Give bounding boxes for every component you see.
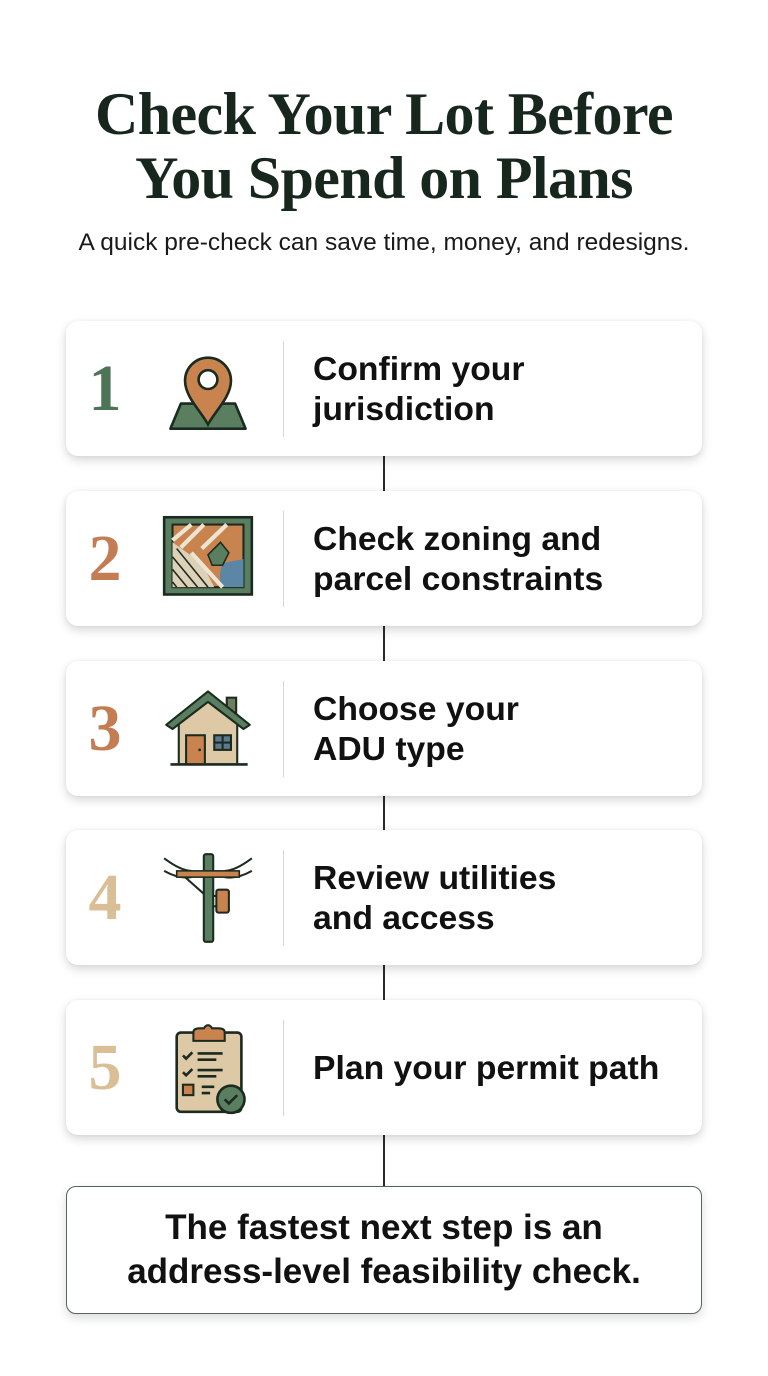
icon: utility pole <box>164 853 252 943</box>
card 3: ADU type <box>66 661 702 796</box>
step text: ADU type <box>313 730 465 768</box>
icon: map pin <box>169 356 247 430</box>
connector line <box>383 456 385 1186</box>
step text: Review utilities <box>313 858 556 896</box>
card 5: permit path <box>66 1000 702 1135</box>
number 2: 2 <box>88 522 122 595</box>
step text <box>313 520 603 598</box>
step text: jurisdiction <box>313 390 495 428</box>
icon: zoning map <box>162 516 254 596</box>
card 4: utilities <box>66 830 702 965</box>
number 4: 4 <box>88 861 122 934</box>
number 1: 1 <box>88 352 122 425</box>
icon: house <box>165 690 251 766</box>
callout: next step <box>66 1186 702 1314</box>
number 3: 3 <box>88 692 122 765</box>
number 5: 5 <box>88 1031 122 1104</box>
step text: and access <box>313 898 495 936</box>
callout: next step: The fastest next step is an <box>165 1208 603 1247</box>
step text <box>313 690 519 768</box>
subtitle: A quick pre-check can save time, money, and redesigns. <box>78 229 690 256</box>
step text <box>313 858 556 936</box>
title <box>95 81 673 211</box>
icon: clipboard <box>175 1024 246 1114</box>
step text: Choose your <box>313 690 519 728</box>
title: Check Your Lot Before <box>95 81 673 147</box>
card 2: zoning <box>66 491 702 626</box>
step text: Check zoning and <box>313 520 601 558</box>
card 1: confirm jurisdiction <box>66 321 702 456</box>
step text: Plan your permit path <box>313 1048 659 1086</box>
step text: Confirm your <box>313 350 524 388</box>
title: You Spend on Plans <box>135 145 633 211</box>
step text <box>312 350 524 428</box>
callout: next step: address-level feasibility check. <box>127 1252 641 1291</box>
step text: parcel constraints <box>313 560 603 598</box>
